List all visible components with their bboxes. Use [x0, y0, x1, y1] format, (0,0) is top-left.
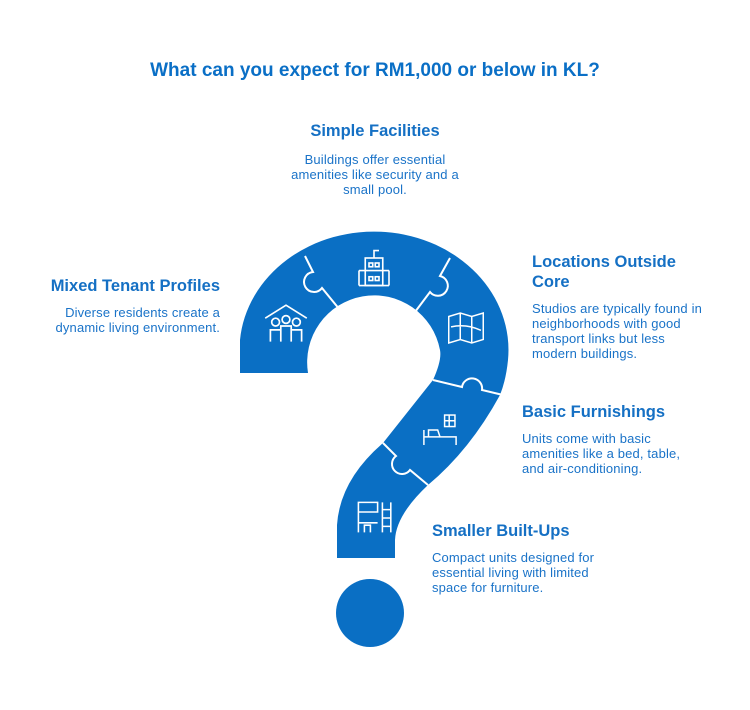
text: locations outside core: transport links but less	[532, 331, 665, 346]
text: locations outside core: neighborhoods with good	[532, 316, 681, 331]
puzzle joints	[304, 256, 503, 485]
text: locations outside core: Core	[532, 273, 570, 291]
text: locations outside core	[532, 253, 702, 361]
text: simple facilities: amenities like security and a	[291, 167, 459, 182]
question mark body	[240, 232, 508, 558]
text: basic furnishings	[522, 403, 680, 476]
text: simple facilities: Buildings offer essential	[305, 152, 445, 167]
text: smaller built-ups	[432, 522, 594, 595]
text: smaller built-ups: Smaller Built-Ups	[432, 522, 570, 540]
icon: map	[449, 313, 483, 343]
text: smaller built-ups: essential living with limited	[432, 565, 589, 580]
text: basic furnishings: Units come with basic	[522, 431, 651, 446]
text: smaller built-ups: Compact units designed for	[432, 550, 594, 565]
text: basic furnishings: Basic Furnishings	[522, 403, 665, 421]
text: mixed tenant profiles: dynamic living environment.	[56, 320, 220, 335]
icon: bunk room	[358, 502, 391, 532]
text: locations outside core: Studios are typically found in	[532, 301, 702, 316]
text: locations outside core: Locations Outside	[532, 253, 676, 271]
icon: building	[359, 250, 389, 286]
text: smaller built-ups: space for furniture.	[432, 580, 543, 595]
text: mixed tenant profiles: Diverse residents create a	[65, 305, 220, 320]
text: basic furnishings: amenities like a bed, table,	[522, 446, 680, 461]
text: simple facilities: Simple Facilities	[310, 122, 440, 140]
icon: bed	[424, 415, 456, 445]
icon: people	[265, 305, 307, 342]
text: simple facilities	[291, 122, 459, 197]
text: locations outside core: modern buildings.	[532, 346, 637, 361]
text: mixed tenant profiles	[51, 277, 220, 335]
text: basic furnishings: and air-conditioning.	[522, 461, 642, 476]
text: simple facilities: small pool.	[343, 182, 407, 197]
text: mixed tenant profiles: Mixed Tenant Profiles	[51, 277, 220, 295]
title: What can you expect for RM1,000 or below in KL?	[150, 60, 600, 81]
dot	[336, 579, 404, 647]
